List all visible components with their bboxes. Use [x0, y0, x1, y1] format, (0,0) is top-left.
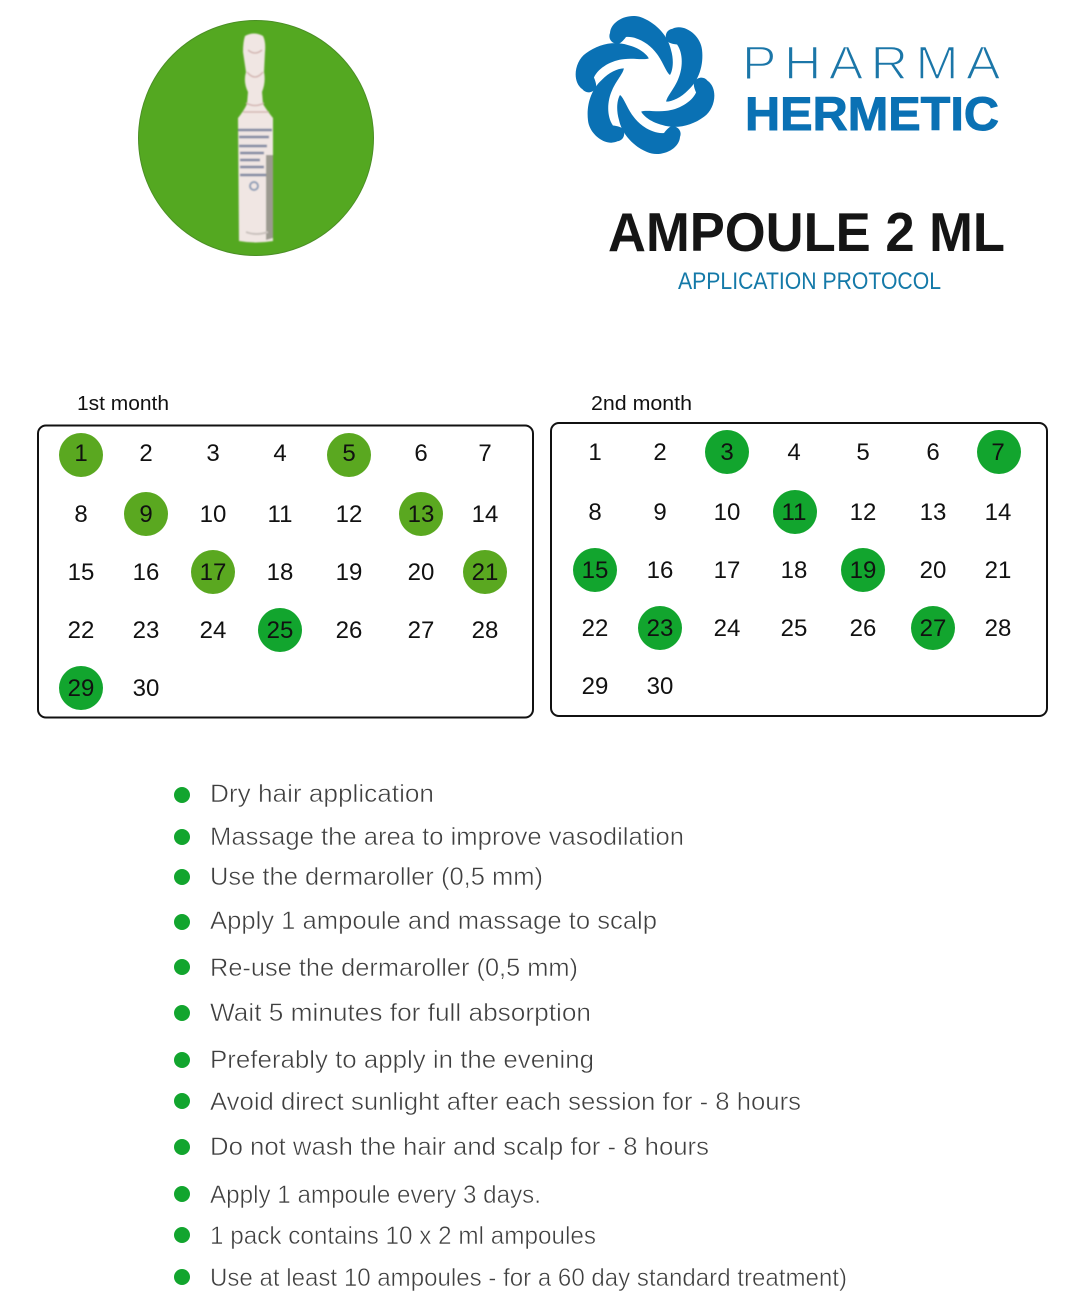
day numbers, month 2: 30 — [647, 673, 673, 700]
instruction texts: Use the dermaroller (0,5 mm) — [210, 863, 543, 891]
day numbers, month 2: 27 — [920, 615, 946, 642]
day numbers, month 2: 6 — [926, 439, 940, 466]
day numbers, month 1: 21 — [472, 559, 498, 586]
day numbers, month 1: 17 — [200, 559, 226, 586]
day numbers, month 2: 16 — [647, 557, 673, 584]
day numbers, month 1: 19 — [336, 559, 362, 586]
day numbers, month 1: 4 — [273, 440, 287, 467]
day numbers, month 2: 11 — [782, 499, 806, 526]
day numbers, month 1: 10 — [200, 501, 226, 528]
instruction texts: Massage the area to improve vasodilation — [210, 823, 684, 851]
day numbers, month 1: 15 — [68, 559, 94, 586]
day numbers, month 1: 22 — [68, 617, 94, 644]
day numbers, month 1: 5 — [342, 440, 356, 467]
day numbers, month 2: 29 — [582, 673, 608, 700]
highlighted application days, month 2 — [573, 430, 1021, 650]
day numbers, month 1: 28 — [472, 617, 498, 644]
icon: logo swirl — [567, 16, 723, 154]
label: 1st month: 1st month — [77, 393, 169, 415]
day numbers, month 1: 23 — [133, 617, 159, 644]
day numbers, month 1: 16 — [133, 559, 159, 586]
instruction texts: Avoid direct sunlight after each session for - 8 hours — [210, 1088, 801, 1116]
instruction texts: Use at least 10 ampoules - for a 60 day standard treatment) — [210, 1264, 847, 1292]
title: AMPOULE 2 ML — [608, 201, 1005, 263]
day numbers, month 2: 17 — [714, 557, 740, 584]
day numbers, month 2: 24 — [714, 615, 740, 642]
day numbers, month 1: 3 — [206, 440, 220, 467]
instruction texts: Re-use the dermaroller (0,5 mm) — [210, 954, 578, 982]
day numbers, month 1: 9 — [139, 501, 153, 528]
day numbers, month 2: 15 — [582, 557, 608, 584]
day numbers, month 1: 26 — [336, 617, 362, 644]
logo word: HERMETIC: HERMETIC — [745, 87, 999, 140]
logo: Pharma Hermetic — [567, 16, 1001, 154]
day numbers, month 1: 18 — [267, 559, 293, 586]
day numbers, month 1: 2 — [139, 440, 153, 467]
day numbers, month 2: 3 — [720, 439, 734, 466]
highlighted application days, month 1 — [59, 433, 507, 710]
calendar: 1st month — [38, 426, 533, 718]
day numbers, month 2: 19 — [850, 557, 876, 584]
day numbers, month 1: 20 — [408, 559, 434, 586]
instruction texts: Wait 5 minutes for full absorption — [210, 999, 591, 1027]
day numbers, month 2: 12 — [850, 499, 876, 526]
day numbers, month 2: 5 — [856, 439, 870, 466]
day numbers, month 2: 2 — [653, 439, 667, 466]
instruction texts: 1 pack contains 10 x 2 ml ampoules — [210, 1222, 596, 1250]
day numbers, month 1 — [68, 440, 498, 702]
day numbers, month 2: 14 — [985, 499, 1011, 526]
instruction texts: Do not wash the hair and scalp for - 8 hours — [210, 1133, 709, 1161]
day numbers, month 2: 7 — [991, 439, 1005, 466]
day numbers, month 2: 25 — [781, 615, 807, 642]
day numbers, month 1: 25 — [267, 617, 293, 644]
instruction texts: Preferably to apply in the evening — [210, 1046, 594, 1074]
instruction texts: Apply 1 ampoule every 3 days. — [210, 1181, 541, 1209]
day numbers, month 2: 20 — [920, 557, 946, 584]
day numbers, month 1: 24 — [200, 617, 226, 644]
day numbers, month 2: 18 — [781, 557, 807, 584]
day numbers, month 1: 30 — [133, 675, 159, 702]
product image: ampoule on green circle — [138, 20, 374, 256]
day numbers, month 2: 4 — [787, 439, 801, 466]
day numbers, month 1: 27 — [408, 617, 434, 644]
day numbers, month 1: 11 — [268, 501, 292, 528]
day numbers, month 2: 21 — [985, 557, 1011, 584]
day numbers, month 2: 10 — [714, 499, 740, 526]
logo word: PHARMA: PHARMA — [742, 37, 1001, 89]
bullet dots — [174, 787, 190, 1285]
day numbers, month 1: 13 — [408, 501, 434, 528]
day numbers, month 1: 8 — [74, 501, 88, 528]
day numbers, month 2 — [582, 439, 1011, 700]
instruction texts: Apply 1 ampoule and massage to scalp — [210, 907, 657, 935]
day numbers, month 2: 8 — [588, 499, 602, 526]
subtitle: APPLICATION PROTOCOL — [678, 268, 941, 295]
instruction texts — [210, 780, 847, 1292]
day numbers, month 1: 12 — [336, 501, 362, 528]
day numbers, month 2: 22 — [582, 615, 608, 642]
day numbers, month 1: 6 — [414, 440, 428, 467]
day numbers, month 1: 1 — [74, 440, 88, 467]
instruction texts: Dry hair application — [210, 780, 434, 808]
calendar: 2nd month — [551, 423, 1047, 716]
label: 2nd month: 2nd month — [591, 393, 692, 415]
day numbers, month 1: 14 — [472, 501, 498, 528]
instruction list — [174, 780, 847, 1292]
day numbers, month 2: 1 — [588, 439, 602, 466]
day numbers, month 2: 28 — [985, 615, 1011, 642]
day numbers, month 2: 26 — [850, 615, 876, 642]
day numbers, month 1: 29 — [68, 675, 94, 702]
day numbers, month 1: 7 — [478, 440, 492, 467]
day numbers, month 2: 23 — [647, 615, 673, 642]
day numbers, month 2: 13 — [920, 499, 946, 526]
day numbers, month 2: 9 — [653, 499, 667, 526]
